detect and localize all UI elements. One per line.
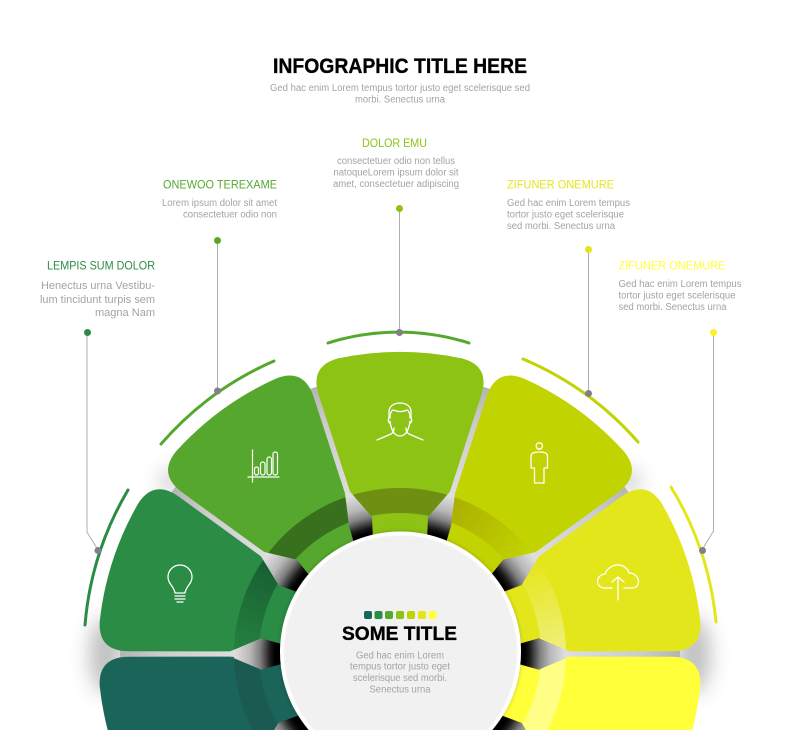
center text: [350, 650, 450, 696]
center text: Ged hac enim Lorem: [356, 650, 444, 662]
text block: lempis sum dolor: lum tincidunt turpis sem: [40, 294, 155, 306]
text block: dolor emu: amet, consectetuer adipiscing: [333, 179, 459, 190]
text block: zifuner onemure 2: Ged hac enim Lorem tempus: [618, 279, 742, 290]
segment: lime, top: [316, 352, 484, 535]
segment: green: [168, 376, 354, 574]
icon: standing person: [531, 443, 548, 483]
text block: zifuner onemure 2: ZIFUNER ONEMURE: [618, 260, 726, 272]
segment: yellow green: [446, 376, 632, 574]
soft shadows in the outer crevices: [90, 470, 710, 693]
center text: scelerisque sed morbi.: [353, 673, 447, 684]
text block: zifuner onemure 1: [507, 180, 630, 232]
text block: lempis sum dolor: [40, 260, 155, 319]
center disc: [280, 531, 521, 730]
subtitle text block: Ged hac enim Lorem tempus tortor justo eget scelerisque sed: [270, 83, 530, 94]
text block: zifuner onemure 1: sed morbi. Senectus urna: [507, 221, 615, 232]
colour swatches: [364, 611, 436, 619]
leader line: green: [214, 237, 221, 394]
segment: yellow, lower right: [500, 657, 700, 730]
subtitle text block: morbi. Senectus urna: [355, 94, 445, 106]
leader line: lime: [396, 205, 403, 336]
subtitle text block: [270, 83, 530, 106]
center heading: SOME TITLE: [342, 623, 457, 645]
segment: dark green: [100, 489, 296, 652]
segment: bright yellow green: [504, 489, 700, 652]
icon: head and shoulders: [377, 403, 423, 440]
text block: onewoo terexame: consectetuer odio non: [183, 210, 277, 220]
text block: lempis sum dolor: Henectus urna Vestibu-: [41, 280, 155, 292]
icon: bar chart: [248, 450, 279, 482]
title: INFOGRAPHIC TITLE HERE: [273, 55, 527, 78]
text block: dolor emu: natoqueLorem ipsum dolor sit: [334, 168, 459, 178]
center text: Senectus urna: [370, 684, 431, 696]
text block: zifuner onemure 2: sed morbi. Senectus urna: [618, 302, 727, 313]
center text: tempus tortor justo eget: [350, 662, 450, 672]
text block: zifuner onemure 1: tortor justo eget scelerisque: [507, 210, 624, 220]
text block: zifuner onemure 2: [618, 260, 742, 313]
text block: onewoo terexame: [162, 180, 277, 220]
icon: cloud upload: [598, 565, 638, 600]
segment: teal, lower left: [100, 657, 300, 730]
text block: zifuner onemure 1: ZIFUNER ONEMURE: [507, 180, 614, 192]
outer arcs: [85, 332, 716, 625]
text block: dolor emu: DOLOR EMU: [362, 138, 427, 150]
text block: dolor emu: [333, 138, 459, 190]
leader line: dark green: [84, 329, 102, 554]
text block: zifuner onemure 1: Ged hac enim Lorem tempus: [507, 198, 630, 209]
text block: lempis sum dolor: LEMPIS SUM DOLOR: [47, 260, 155, 272]
leader line: yellow green: [585, 246, 592, 397]
gaps between segments: gradient wedges: [120, 374, 680, 730]
leader line: yellow: [699, 329, 717, 554]
text block: onewoo terexame: ONEWOO TEREXAME: [163, 180, 277, 192]
text block: zifuner onemure 2: tortor justo eget scelerisque: [618, 290, 736, 302]
icon: light bulb: [168, 565, 192, 602]
text block: onewoo terexame: Lorem ipsum dolor sit amet: [162, 198, 277, 209]
text block: lempis sum dolor: magna Nam: [95, 307, 155, 319]
text block: dolor emu: consectetuer odio non tellus: [337, 156, 455, 167]
